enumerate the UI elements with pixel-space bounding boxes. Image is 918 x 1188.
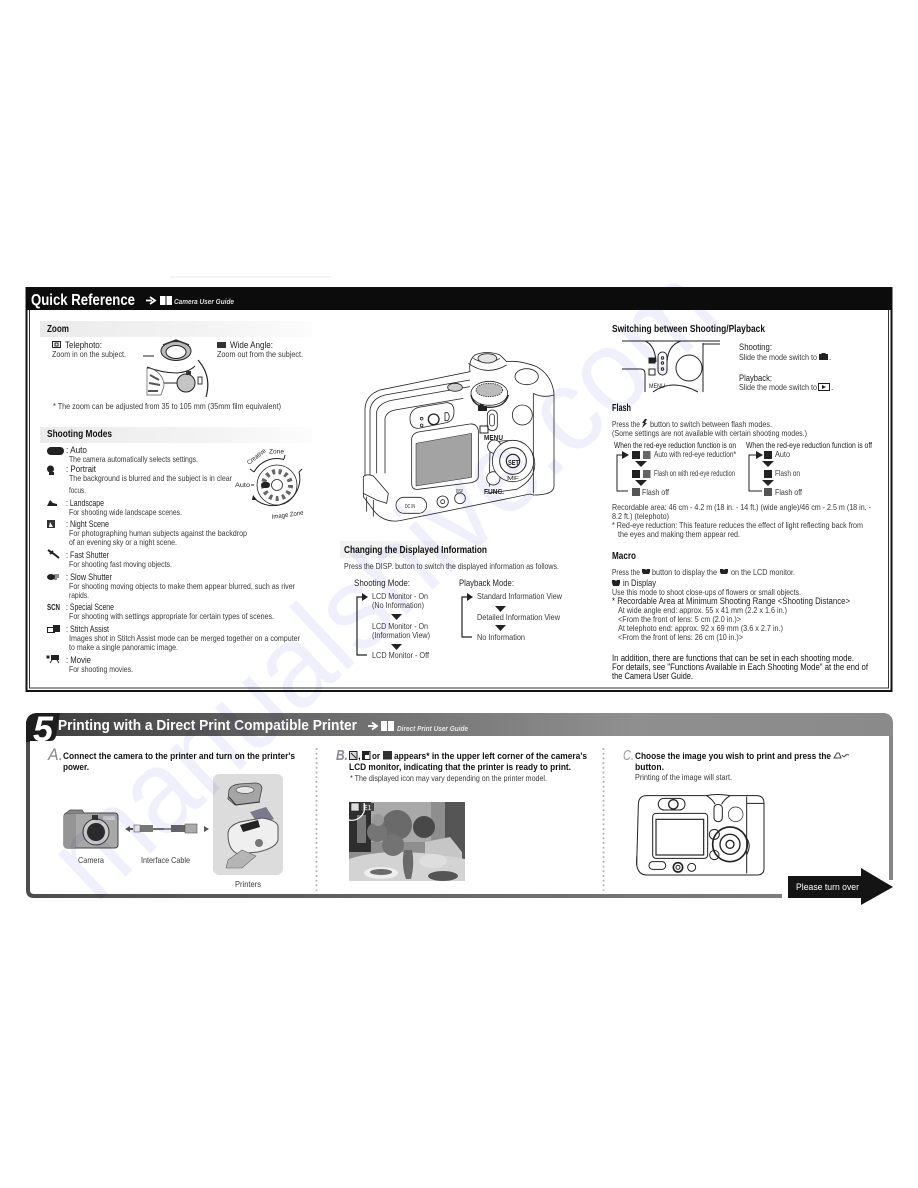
image: camera — [64, 810, 118, 848]
macro detail: <From the front of lens: 5 cm (2.0 in.)> — [618, 614, 741, 624]
heading: flash: Flash — [612, 403, 631, 414]
step C instruction: button. — [635, 762, 664, 773]
label: creative zone: Creative — [246, 447, 268, 467]
flow: red-eye on: Flash on with red-eye reduction — [654, 468, 735, 478]
step letter C: C. — [623, 747, 634, 764]
mode: landscape: : Landscape — [66, 498, 104, 508]
label: interface cable: Interface Cable — [141, 855, 190, 865]
step A instruction: power. — [63, 762, 89, 773]
camera button labels: MF — [507, 476, 519, 482]
panel: switching between shooting and playback — [612, 324, 833, 392]
flash intro: (Some settings are not available with certain shooting modes.) — [612, 428, 807, 438]
step C — [623, 747, 849, 875]
mode: slow shutter: rapids. — [69, 590, 89, 600]
mode: night scene: For photographing human subjects against the backdrop — [69, 528, 247, 538]
flash intro: Press the — [612, 419, 640, 429]
mode: special scene: : Special Scene — [66, 602, 114, 612]
mode: night scene: : Night Scene — [66, 519, 109, 529]
flow: shooting mode: Shooting Mode: — [354, 578, 410, 588]
step B instruction: LCD monitor, indicating that the printer is ready to print. — [349, 762, 571, 773]
icon: wide angle — [217, 342, 226, 348]
step C instruction — [635, 751, 849, 773]
camera user guide reference: Camera User Guide — [174, 299, 234, 306]
diagram: mode dial — [235, 447, 304, 521]
wide angle text — [217, 340, 303, 359]
macro intro: button to display the — [652, 567, 717, 577]
mode: auto: : Auto — [66, 445, 87, 455]
mode: special scene: For shooting with settings appropriate for certain types of scenes. — [69, 611, 274, 621]
mode: stitch assist: to make a single panoramic image. — [69, 642, 178, 652]
mode: movie — [47, 655, 133, 674]
flow: playback mode: Playback Mode: — [459, 578, 514, 588]
label: camera: Camera — [78, 855, 104, 865]
flow: red-eye on: Flash off — [642, 487, 670, 497]
mode: night scene: of an evening sky or a night scene. — [69, 537, 177, 547]
step A instruction — [63, 751, 295, 773]
flow: shooting mode: LCD Monitor - On — [372, 621, 428, 631]
playback text: Slide the mode switch to — [739, 382, 817, 392]
wide angle text: Wide Angle: — [230, 340, 273, 350]
flash notes: 8.2 ft.) (telephoto) — [612, 511, 669, 521]
step B instruction: , — [358, 751, 361, 762]
intro text: Press the DISP. button to switch the displayed information as follows. — [344, 561, 559, 571]
flow: playback mode: Standard Information View — [477, 591, 563, 601]
mode: night scene — [47, 519, 247, 547]
mode: slow shutter: For shooting moving objects to make them appear blurred, such as river — [69, 581, 295, 591]
macro detail: * Recordable Area at Minimum Shooting Range <Shooting Distance> — [612, 596, 850, 606]
flow: shooting mode — [354, 578, 430, 660]
mode: landscape — [47, 498, 182, 517]
flow: shooting mode: LCD Monitor - On — [372, 591, 428, 601]
macro detail: <From the front of lens: 26 cm (10 in.)> — [618, 632, 743, 642]
mode: portrait — [47, 464, 232, 495]
step letter B: B. — [336, 747, 348, 764]
number badge: 5: 5 — [33, 710, 54, 749]
step A instruction: Connect the camera to the printer and turn on the printer's — [63, 751, 295, 762]
step B instruction: appears* in the upper left corner of the camera's — [394, 751, 587, 762]
please turn over text: Please turn over — [796, 882, 859, 893]
flash intro — [612, 419, 807, 438]
flash notes — [612, 502, 871, 539]
panel: zoom — [40, 321, 312, 411]
playback text: . — [831, 382, 833, 392]
macro intro — [612, 567, 795, 577]
shooting text: Shooting: — [739, 342, 772, 352]
mode: fast shutter: For shooting fast moving objects. — [69, 559, 172, 569]
flash notes: * Red-eye reduction: This feature reduces the effect of light reflecting back from — [612, 520, 863, 530]
playback text: Playback: — [739, 373, 772, 383]
closing note — [612, 653, 868, 681]
image: interface cable — [125, 824, 209, 833]
step B — [336, 747, 587, 881]
icon: book — [381, 721, 394, 731]
step letter A: A. — [47, 745, 63, 764]
step B instruction — [349, 751, 587, 773]
panel: flash — [612, 403, 873, 539]
zoom footnote: * The zoom can be adjusted from 35 to 105 mm (35mm film equivalent) — [53, 401, 281, 411]
macro detail: At telephoto end: approx. 92 x 69 mm (3.6 x 2.7 in.) — [618, 623, 783, 633]
watermark: manualshive.com — [23, 241, 742, 924]
diagram: zoom lever — [143, 340, 208, 397]
flow: red-eye off: When the red-eye reduction function is off — [746, 440, 873, 450]
flow: playback mode — [459, 578, 563, 642]
step B instruction: or — [372, 751, 380, 762]
flow: shooting mode: (No Information) — [372, 600, 424, 610]
label: zone (creative): Zone — [269, 448, 284, 456]
printers backdrop — [213, 774, 283, 875]
telephoto text: Zoom in on the subject. — [52, 349, 126, 359]
heading: quick reference: Quick Reference — [31, 292, 135, 309]
flow: shooting mode: LCD Monitor - Off — [372, 650, 430, 660]
panel: printing with a direct print compatible printer — [26, 710, 893, 898]
arrow: please turn over — [788, 868, 893, 905]
playback text — [739, 373, 833, 392]
telephoto text — [52, 340, 126, 359]
closing note: For details, see "Functions Available in Each Shooting Mode" at the end of — [612, 662, 868, 672]
flow: red-eye off: Auto — [775, 449, 790, 459]
camera button labels: MENU — [484, 433, 503, 442]
diagram: mode switch — [622, 341, 720, 392]
telephoto text: Telephoto: — [65, 340, 102, 350]
flow: red-eye off — [746, 440, 873, 497]
image: compact printer — [228, 783, 262, 805]
image: LCD monitor photo — [349, 802, 465, 881]
wide angle text: Zoom out from the subject. — [217, 349, 303, 359]
mode: stitch assist: Images shot in Stitch Assist mode can be merged together on a computer — [69, 633, 300, 643]
icon: book — [160, 296, 172, 305]
diagram: camera rear with print button — [637, 794, 764, 875]
mode: slow shutter — [47, 572, 295, 600]
step B footnote: * The displayed icon may vary depending on the printer model. — [350, 773, 547, 783]
mode: special scene: SCN — [47, 602, 60, 612]
heading: changing displayed information: Changing the Displayed Information — [344, 545, 487, 556]
diagram: camera back — [363, 352, 554, 521]
heading: macro: Macro — [612, 551, 636, 562]
shooting text: Slide the mode switch to — [739, 352, 817, 362]
camera button labels: FUNC. — [484, 487, 504, 496]
camera button labels: DISP — [456, 489, 463, 495]
macro detail: At wide angle end: approx. 55 x 41 mm (2.2 x 1.6 in.) — [618, 605, 787, 615]
mode: fast shutter: : Fast Shutter — [66, 550, 109, 560]
flow: red-eye on: When the red-eye reduction function is on — [614, 440, 736, 450]
heading: printing: Printing with a Direct Print Compatible Printer — [58, 717, 357, 734]
arrow: see guide — [368, 722, 377, 730]
shooting text: . — [829, 352, 831, 362]
flash notes: Recordable area: 46 cm - 4.2 m (18 in. - 14 ft.) (wide angle)/46 cm - 2.5 m (18 in. - — [612, 502, 871, 512]
flash notes: the eyes and making them appear red. — [618, 529, 740, 539]
closing note: In addition, there are functions that can be set in each shooting mode. — [612, 653, 854, 663]
mode: portrait: : Portrait — [66, 464, 96, 474]
flow: shooting mode: (Information View) — [372, 630, 430, 640]
mode: special scene — [47, 602, 274, 621]
panel: shooting modes — [40, 427, 312, 674]
camera button labels: SET — [508, 458, 519, 467]
mode: portrait: focus. — [69, 485, 86, 495]
mode: portrait: The background is blurred and the subject is in clear — [69, 473, 232, 483]
mode: fast shutter — [48, 550, 172, 569]
closing note: the Camera User Guide. — [612, 671, 693, 681]
mode: movie: For shooting movies. — [69, 664, 133, 674]
mode: stitch assist — [48, 624, 300, 652]
heading: zoom: Zoom — [47, 324, 69, 335]
macro detail: in Display — [623, 578, 657, 588]
flow: red-eye on: Auto with red-eye reduction* — [654, 449, 737, 459]
step C description: Printing of the image will start. — [635, 772, 732, 782]
label: auto: Auto — [235, 482, 250, 489]
step A — [47, 745, 295, 889]
mode: movie: : Movie — [66, 655, 91, 665]
shooting text — [739, 342, 831, 362]
flow: red-eye off: Flash on — [775, 468, 800, 478]
panel: macro — [612, 551, 868, 681]
number badge: 5 — [26, 710, 60, 749]
mode: auto — [47, 445, 198, 464]
macro detail — [612, 578, 850, 642]
mode: stitch assist: : Stitch Assist — [66, 624, 109, 634]
camera button labels: DC IN — [405, 504, 415, 510]
direct print user guide reference: Direct Print User Guide — [397, 726, 468, 733]
flow: playback mode: No Information — [477, 632, 525, 642]
mode: landscape: For shooting wide landscape scenes. — [69, 507, 182, 517]
flow: red-eye on — [614, 440, 737, 497]
diagram: mode switch: MENU — [649, 383, 665, 390]
macro intro: Press the — [612, 567, 640, 577]
panel: changing the displayed information — [340, 541, 563, 660]
heading: switching: Switching between Shooting/Playback — [612, 324, 765, 335]
flow: red-eye off: Flash off — [775, 487, 803, 497]
camera button labels — [405, 404, 519, 510]
icon: telephoto — [52, 342, 60, 348]
panel: quick reference — [26, 288, 892, 691]
step C instruction: Choose the image you wish to print and press the — [635, 751, 831, 762]
mode: slow shutter: : Slow Shutter — [66, 572, 112, 582]
arrow: see guide — [146, 297, 155, 304]
image: LCD monitor photo: E1 — [363, 805, 372, 812]
flow: playback mode: Detailed Information View — [477, 612, 561, 622]
macro intro: on the LCD monitor. — [731, 567, 795, 577]
heading: shooting modes: Shooting Modes — [47, 429, 112, 440]
macro detail: Use this mode to shoot close-ups of flowers or small objects. — [612, 587, 801, 597]
mode: auto: The camera automatically selects settings. — [69, 454, 198, 464]
image: inkjet printer — [226, 807, 278, 868]
flash intro: button to switch between flash modes. — [650, 419, 772, 429]
label: image zone: Image Zone — [271, 510, 304, 521]
label: printers: Printers — [235, 879, 261, 889]
